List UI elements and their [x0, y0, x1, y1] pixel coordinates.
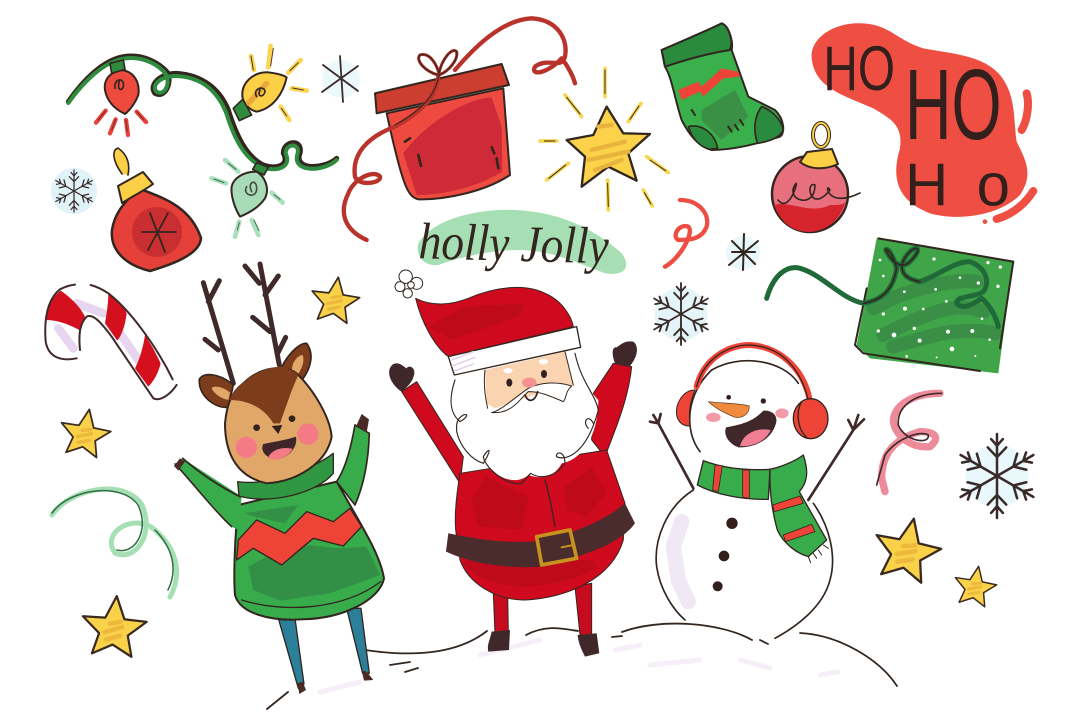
icon: snowflake right — [956, 434, 1038, 518]
face — [706, 395, 789, 447]
red ornament — [112, 148, 201, 271]
text: ho lower: Ho — [905, 152, 1010, 219]
icon: snowflake centre — [651, 283, 711, 345]
head — [690, 361, 798, 452]
character: snowman — [650, 345, 864, 638]
red ribbon swirl — [665, 200, 707, 267]
red gift box with ribbon — [344, 18, 575, 240]
pompom — [395, 270, 423, 298]
collar — [238, 453, 333, 499]
speech blob: ho ho ho — [812, 23, 1033, 224]
buttons — [713, 518, 738, 591]
head marking — [229, 367, 298, 423]
moustache — [492, 383, 572, 413]
legs — [278, 608, 373, 694]
icon: snowflake left — [51, 168, 97, 214]
snow hills — [267, 624, 897, 709]
arms — [650, 414, 864, 500]
beard — [451, 353, 598, 480]
face — [236, 415, 319, 460]
hat — [416, 287, 573, 357]
pink ribbon swirl — [877, 393, 942, 492]
scarf — [697, 455, 828, 563]
green stocking — [662, 23, 783, 150]
candy cane — [45, 285, 177, 399]
big yellow star with rays — [540, 68, 668, 210]
character: reindeer — [174, 264, 384, 694]
antlers — [203, 264, 286, 383]
string of christmas lights — [68, 46, 337, 237]
pink ornament — [772, 123, 860, 232]
green bulb — [212, 160, 283, 237]
belt — [446, 503, 635, 567]
text: ho large: HO — [905, 49, 1002, 161]
yellow bulb — [233, 46, 307, 121]
ears — [199, 343, 311, 407]
sweater — [174, 414, 384, 620]
arms — [402, 363, 632, 483]
green ribbon swirl — [52, 489, 177, 597]
body — [455, 450, 625, 600]
icon: snowflake top — [322, 56, 360, 102]
red bulb — [96, 60, 146, 135]
banner: holly jolly — [418, 210, 626, 275]
gloves — [389, 341, 637, 392]
face — [485, 352, 573, 408]
body — [656, 490, 833, 638]
character: santa — [389, 270, 637, 657]
green gift with dots — [767, 238, 1013, 373]
hat band — [448, 327, 581, 375]
earmuffs — [676, 345, 828, 439]
head — [225, 368, 332, 483]
buckle — [537, 530, 577, 565]
yellow stars — [57, 274, 999, 658]
text: holly jolly: holly Jolly — [418, 213, 609, 275]
legs and boots — [488, 583, 599, 657]
icon: snowflake centre right — [726, 234, 760, 270]
text: ho: HO — [823, 34, 895, 104]
